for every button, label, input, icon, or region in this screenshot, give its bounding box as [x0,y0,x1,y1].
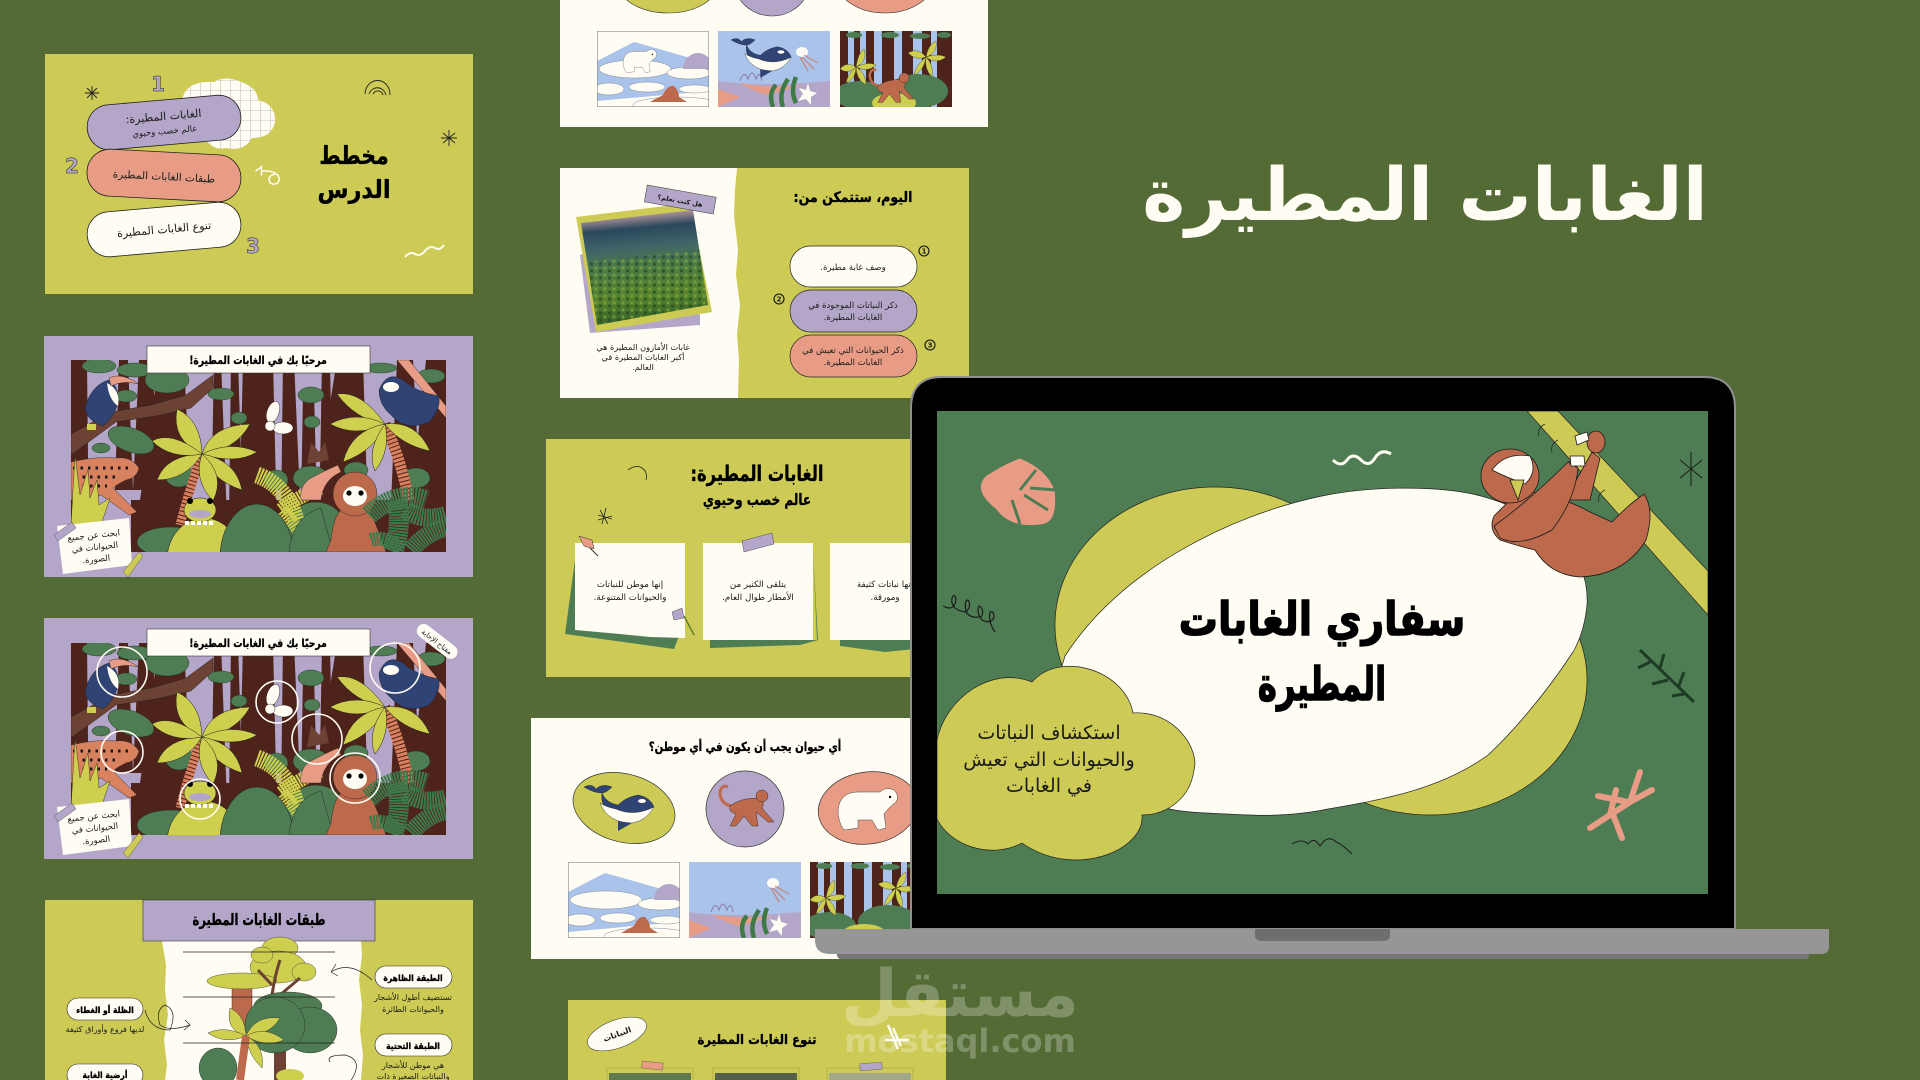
panel: lesson outline slide [45,54,473,294]
numbers: 2 [65,154,79,178]
layer lines [183,952,335,1043]
tape [742,533,774,552]
label: canopy: الظلة أو الغطاء [76,1005,134,1015]
card 2 [703,543,818,648]
habitat: polar [565,862,692,944]
sticky note: الصورة. [82,553,111,566]
animal: monkey [706,771,784,847]
jungle illustration [71,359,446,612]
icon: push pin [579,536,598,556]
sticky note: الحيوانات في [71,822,119,836]
sticky note: الصورة. [82,834,111,847]
tree diagram [199,937,337,1080]
panel: objectives slide [560,168,969,398]
cloud text: استكشاف النباتات [977,722,1121,744]
label: canopy: لديها فروع وأوراق كثيفة [66,1024,144,1034]
title box: مرحبًا بك في الغابات المطيرة! [189,354,327,367]
objective 2 [790,290,917,332]
heading: أي حيوان يجب أن يكون في أي موطن؟ [649,739,841,754]
pill: layers topic: طبقات الغابات المطيرة [113,168,215,186]
pill: layers topic [86,148,242,203]
main title [1179,593,1465,712]
objective 3: الغابات المطيرة. [824,358,882,368]
panel: diversity slide [568,1000,946,1080]
answer key label [414,621,460,662]
olive pole [1527,411,1708,615]
doodle: white squiggle [1333,452,1391,464]
arrows [145,964,372,1080]
card 3: إنها نباتات كثيفة [857,580,913,590]
pill: rainforests topic: عالم خصب وحيوي [132,124,198,140]
sticky note: ابحث عن جميع [67,809,121,825]
grid cloud [182,78,275,149]
pill: rainforests topic [85,93,243,152]
panel: which animal slide [531,718,923,959]
pill: diversity topic: تنوع الغابات المطيرة [116,219,212,240]
doodles [85,80,457,146]
objective 3: ذكر الحيوانات التي تعيش في [802,346,904,356]
pill: diversity topic [85,200,243,259]
main title: المطيرة [1258,658,1386,712]
sloth [1481,431,1650,577]
caption: غابات الأمازون المطيرة هي [596,342,690,352]
label: understory [375,1034,452,1080]
label: forest floor: أرضية الغابة [83,1070,128,1080]
number badges [774,246,935,350]
card 2: يتلقى الكثير من [730,580,787,590]
panel: welcome jungle slide [44,336,473,612]
heading: page title: الغابات المطيرة [1142,153,1708,238]
objective 1: وصف غابة مطيرة. [820,263,886,273]
answer key label: مفتاح الإجابة [420,628,454,657]
doodle: coral branch [1590,772,1652,838]
photo frame [576,203,712,333]
animal: polar bear [813,765,923,851]
objective 2: الغابات المطيرة. [824,313,882,323]
olive blobs [1055,487,1587,815]
laptop base [815,929,1829,954]
doodle: white arrow [256,167,280,184]
laptop bezel [911,377,1735,929]
header: طبقات الغابات المطيرة [193,911,325,930]
label: understory: الطبقة التحتية [386,1041,440,1051]
label: emergent layer: والحيوانات الطائرة [382,1005,444,1014]
monstera leaf [979,457,1057,527]
plants label: النباتات [602,1025,633,1044]
label: understory: هي موطن للأشجار [381,1060,444,1070]
number badges: 2 [777,296,782,304]
habitat ellipses [616,0,935,16]
cloud text: والحيوانات التي تعيش [963,749,1135,771]
laptop shadow strip [837,945,1809,959]
sticky note [54,518,143,577]
torn paper [162,941,363,1080]
cloud text [963,722,1135,797]
photos [609,1073,911,1080]
cream oval [1058,488,1587,815]
label: emergent layer [373,966,452,1014]
doodle: asterisk [1680,452,1702,486]
objective 1 [790,246,917,287]
card 3 [830,543,940,652]
number badges: 3 [928,342,933,350]
doodles [598,466,646,524]
label: emergent layer: تستضيف أطول الأشجار [373,992,452,1002]
answer circles [97,643,420,819]
cloud [937,666,1195,860]
header [143,900,375,941]
card 3: ومورقة. [870,593,900,603]
pill: rainforests topic: الغابات المطيرة: [125,107,202,126]
sticky note: الحيوانات في [71,541,119,555]
heading: الدرس [317,175,391,204]
torn paper [560,168,740,398]
watermark: mostaql.com [844,1022,1076,1060]
heading: مخطط [319,142,389,171]
tapes [642,1061,882,1071]
laptop notch [1255,929,1390,941]
panel: answer key slide [44,618,473,895]
numbers [65,72,260,258]
icon: flower [672,608,694,635]
heading: اليوم، ستتمكن من: [794,189,912,206]
sticky note: ابحث عن جميع [67,528,121,544]
caption [596,342,690,372]
number badges: 1 [922,248,927,256]
sticky note [54,799,143,858]
caption: أكبر الغابات المطيرة في [602,352,684,362]
heading [317,142,391,204]
caption: العالم. [632,362,654,372]
card 1 [565,543,685,649]
panel: animals matching slide top crop [560,0,988,127]
habitat: polar [594,31,721,113]
label: forest floor [67,1064,143,1080]
card 2: الأمطار طوال العام. [722,591,794,603]
did you know label: هل كنت تعلم؟ [657,193,704,209]
panel: fertile world slide [546,439,940,677]
habitat: ocean [689,862,801,938]
watermark: مستقل [841,957,1079,1032]
photo cards [607,1068,913,1080]
laptop mockup [815,377,1829,959]
main title: سفاري الغابات [1179,593,1465,647]
flower doodle [885,1025,909,1049]
title box [147,629,370,656]
objective 2: ذكر النباتات الموجودة في [808,301,898,311]
heading: عالم خصب وحيوي [703,492,811,511]
cloud text: في الغابات [1006,775,1092,797]
doodle: bottom squiggle [1292,839,1352,854]
habitat: ocean [718,31,830,107]
heading [691,461,823,511]
doodle: spiral [943,595,995,632]
objective 3 [790,335,917,377]
heading: تنوع الغابات المطيرة [697,1032,817,1047]
numbers: 3 [246,234,260,258]
plants label [583,1010,651,1058]
label: emergent layer: الطبقة الظاهرة [383,973,443,983]
jungle illustration [71,642,446,895]
habitat: jungle [804,862,922,944]
label: canopy [66,998,144,1034]
habitat: jungle [834,31,952,113]
panel: rainforest layers slide [45,900,473,1080]
title box [147,346,370,373]
screen slide [937,411,1708,894]
card 1: والحيوانات المتنوعة. [594,593,666,603]
doodle: outlined leaf [1638,650,1694,702]
card 1: إنها موطن للنباتات [597,580,663,590]
numbers: 1 [151,72,165,96]
heading: الغابات المطيرة: [691,461,823,487]
did you know label [644,185,716,214]
doodle: white zigzag [405,245,444,257]
title box: مرحبًا بك في الغابات المطيرة! [189,637,327,650]
animal: whale [565,762,683,854]
